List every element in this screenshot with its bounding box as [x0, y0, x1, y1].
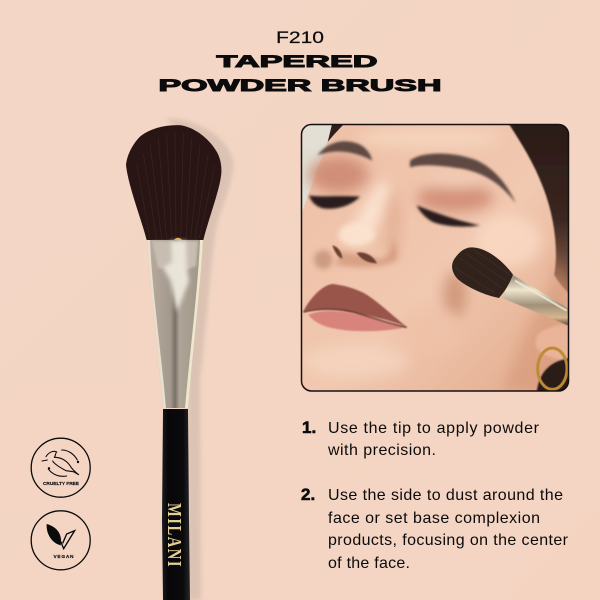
- brush product image: [126, 119, 233, 600]
- ear and earring: [536, 325, 573, 395]
- bristles: [126, 125, 221, 240]
- step 1: 1.: [302, 418, 316, 437]
- title block: [158, 28, 442, 95]
- label: cruelty free: CRUELTY FREE: [43, 481, 80, 487]
- icon: leaf and V: [47, 524, 75, 549]
- icon: rabbit: [42, 450, 79, 476]
- step 2: face or set base complexion: [328, 510, 540, 527]
- step 2: of the face.: [328, 555, 410, 572]
- face shading: [302, 128, 572, 395]
- brush shadow: [165, 119, 233, 600]
- handle: [162, 409, 190, 600]
- product code: F210: [276, 28, 324, 47]
- step 1: [302, 418, 540, 459]
- heading: powder brush: POWDER BRUSH: [158, 77, 442, 95]
- photo: model applying powder with brush: [300, 123, 573, 395]
- heading: tapered: TAPERED: [216, 53, 378, 71]
- nose: [314, 223, 397, 269]
- ferrule: [147, 238, 203, 408]
- step 2: [301, 485, 569, 572]
- step 2: products, focusing on the center: [328, 532, 569, 549]
- step 1: Use the tip to apply powder: [328, 420, 540, 437]
- instructions: [301, 418, 569, 572]
- step 2: 2.: [301, 485, 315, 504]
- badge: vegan: [31, 511, 90, 570]
- photo background: [302, 125, 332, 212]
- step 1: with precision.: [327, 442, 436, 459]
- photo border: [302, 124, 568, 391]
- handle logo: MILANI: [163, 503, 185, 568]
- label: vegan: VEGAN: [54, 554, 74, 560]
- closed eyes: [309, 195, 480, 227]
- lips: [303, 284, 407, 331]
- hair: [328, 123, 572, 296]
- step 2: Use the side to dust around the: [328, 487, 563, 504]
- eyebrows: [318, 141, 516, 203]
- badge: cruelty free: [31, 438, 90, 497]
- eyeshadow: [308, 156, 493, 212]
- photo brush: [452, 247, 569, 325]
